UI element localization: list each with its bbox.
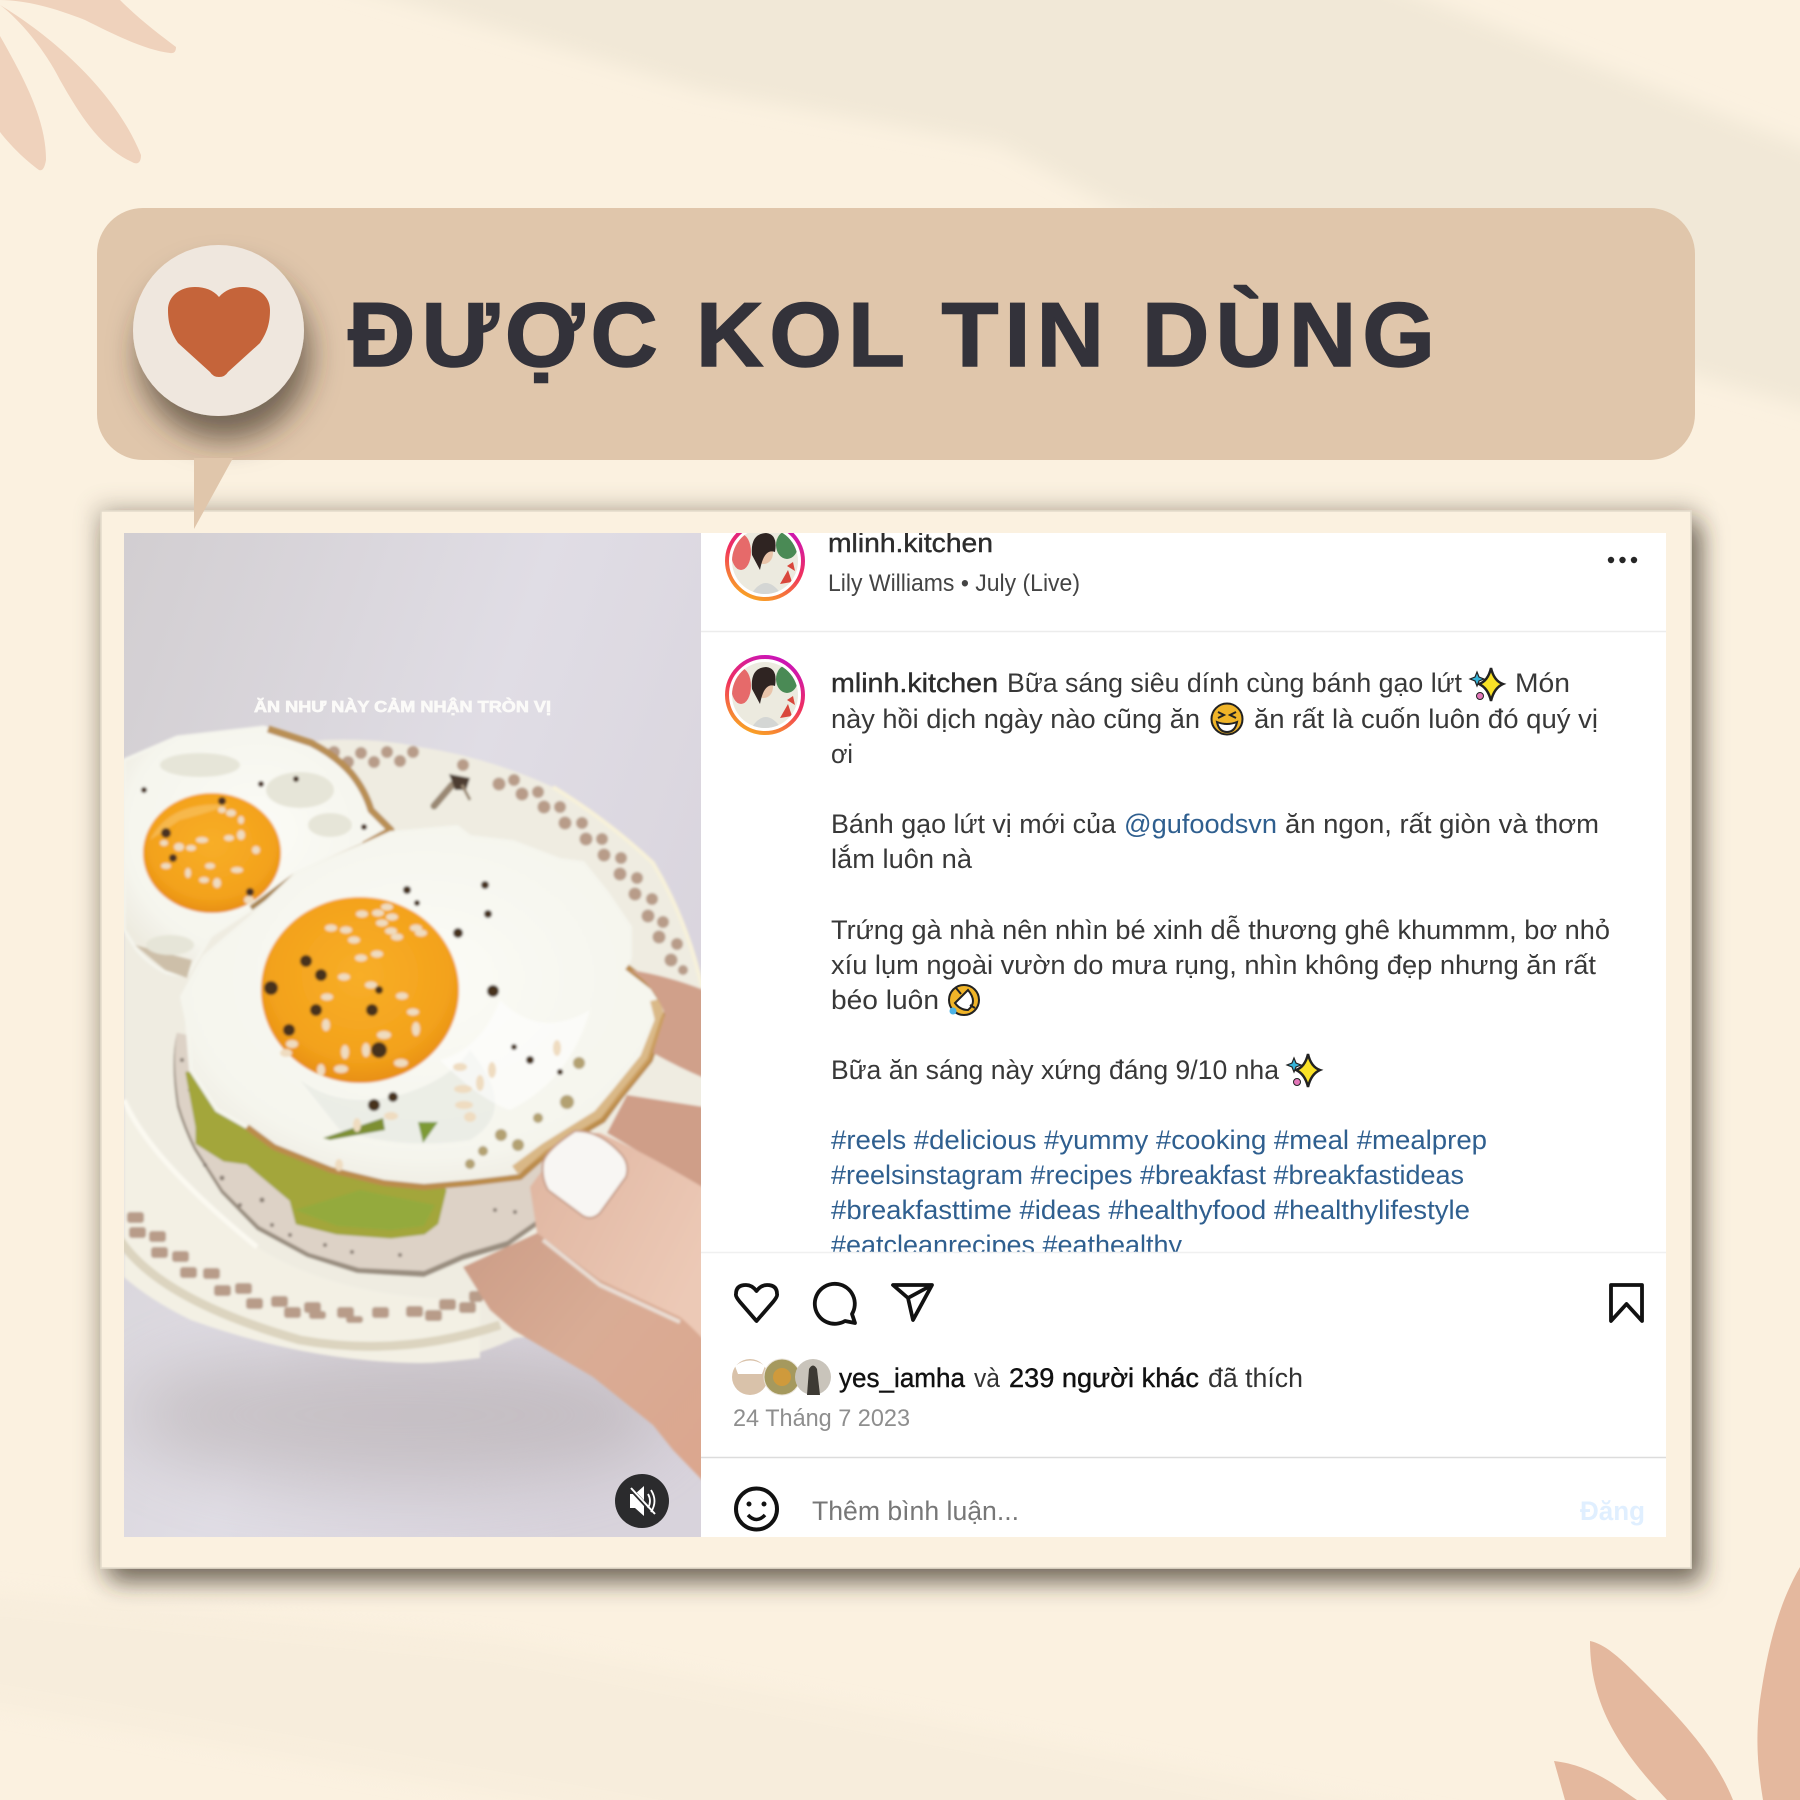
icon: sparkles emoji (1287, 1054, 1320, 1087)
hand (463, 970, 704, 1482)
post date: 24 Tháng 7 2023 (733, 1405, 910, 1432)
action icons (736, 1284, 1642, 1324)
caption: lắm luôn nà (831, 843, 973, 874)
caption: này hồi dịch ngày nào cũng ăn (831, 704, 1200, 734)
plate checker pattern (127, 746, 688, 1323)
caption: @gufoodsvn (1124, 809, 1277, 839)
song line: Lily Williams • July (Live) (828, 570, 1080, 597)
plate (124, 740, 704, 1363)
egg bubbles (465, 1057, 585, 1169)
icon: comment (815, 1284, 855, 1324)
caption: ơi (831, 739, 853, 769)
caption: ăn rất là cuốn luôn đó quý vị (1254, 704, 1598, 734)
food photo illustration (120, 727, 704, 1482)
icon: mute button (615, 1474, 669, 1528)
panel: instagram post (701, 523, 1666, 1537)
avatar (727, 523, 803, 600)
avocado (187, 1073, 445, 1237)
icon: heart (736, 1285, 777, 1321)
comment box: Thêm bình luận... (812, 1496, 1019, 1526)
caption avatar (727, 657, 803, 734)
back egg toppings (141, 776, 367, 904)
caption: Món (1515, 668, 1570, 698)
caption: béo luôn (831, 985, 939, 1015)
back egg (124, 727, 391, 978)
icon: rolling laugh emoji (949, 985, 979, 1015)
hashtags: #reels #delicious #yummy #cooking #meal #mealprep (831, 1125, 1487, 1155)
decorative leaves: top left (0, 0, 176, 170)
title: ĐƯỢC KOL TIN DÙNG (348, 285, 1441, 386)
caption: Trứng gà nhà nên nhìn bé xinh dễ thương ghê khummm, bơ nhỏ (831, 914, 1610, 945)
liked by: đã thích (1208, 1363, 1303, 1393)
rice cake (174, 1033, 560, 1277)
liked by (732, 1359, 1303, 1395)
icon: bookmark (1611, 1285, 1642, 1321)
nail (543, 1131, 627, 1218)
pepper flakes (264, 881, 563, 1111)
comment box: Đăng (1580, 1496, 1645, 1526)
comment box (736, 1488, 1645, 1530)
heart icon badge (133, 245, 304, 416)
hashtags (831, 1125, 1487, 1260)
caption: Bánh gạo lứt vị mới của (831, 809, 1117, 839)
post header (727, 523, 1637, 600)
decorative leaves: bottom right (1554, 1567, 1800, 1800)
caption: ăn ngon, rất giòn và thơm (1285, 809, 1599, 839)
panel: video photo (120, 533, 704, 1537)
caption: mlinh.kitchen (831, 668, 998, 698)
heading banner (97, 208, 1695, 460)
banner speech tail (194, 458, 233, 529)
icon: more menu (1608, 557, 1637, 563)
liked by: yes_iamha (839, 1363, 966, 1393)
caption: xíu lụm ngoài vườn do mưa rụng, nhìn không đẹp nhưng ăn rất (831, 950, 1596, 980)
liked by: 239 người khác (1009, 1363, 1199, 1393)
caption: Bữa ăn sáng này xứng đáng 9/10 nha (831, 1055, 1280, 1085)
post card (96, 506, 1696, 1573)
icon: send (893, 1285, 932, 1320)
caption: Bữa sáng siêu dính cùng bánh gạo lứt (1007, 668, 1462, 698)
account name: mlinh.kitchen (828, 528, 993, 558)
plate stain (434, 774, 470, 806)
icon: smile (736, 1488, 777, 1530)
hashtags: #breakfasttime #ideas #healthyfood #healthylifestyle (831, 1195, 1470, 1225)
sesame seeds (280, 904, 561, 1171)
table shadow (130, 1345, 670, 1485)
hashtags: #eatcleanrecipes #eathealthy (831, 1230, 1182, 1260)
icon: laughing emoji (1212, 704, 1242, 734)
back egg mottling (146, 753, 352, 955)
video caption: ĂN NHƯ NÀY CẢM NHẬN TRÒN VỊ (254, 697, 551, 716)
liked by: và (974, 1363, 1001, 1393)
front egg (182, 827, 668, 1187)
hashtags: #reelsinstagram #recipes #breakfast #breakfastideas (831, 1160, 1464, 1190)
caption (727, 657, 1610, 1260)
icon: sparkles emoji (1470, 668, 1503, 701)
liker avatars (732, 1359, 831, 1395)
